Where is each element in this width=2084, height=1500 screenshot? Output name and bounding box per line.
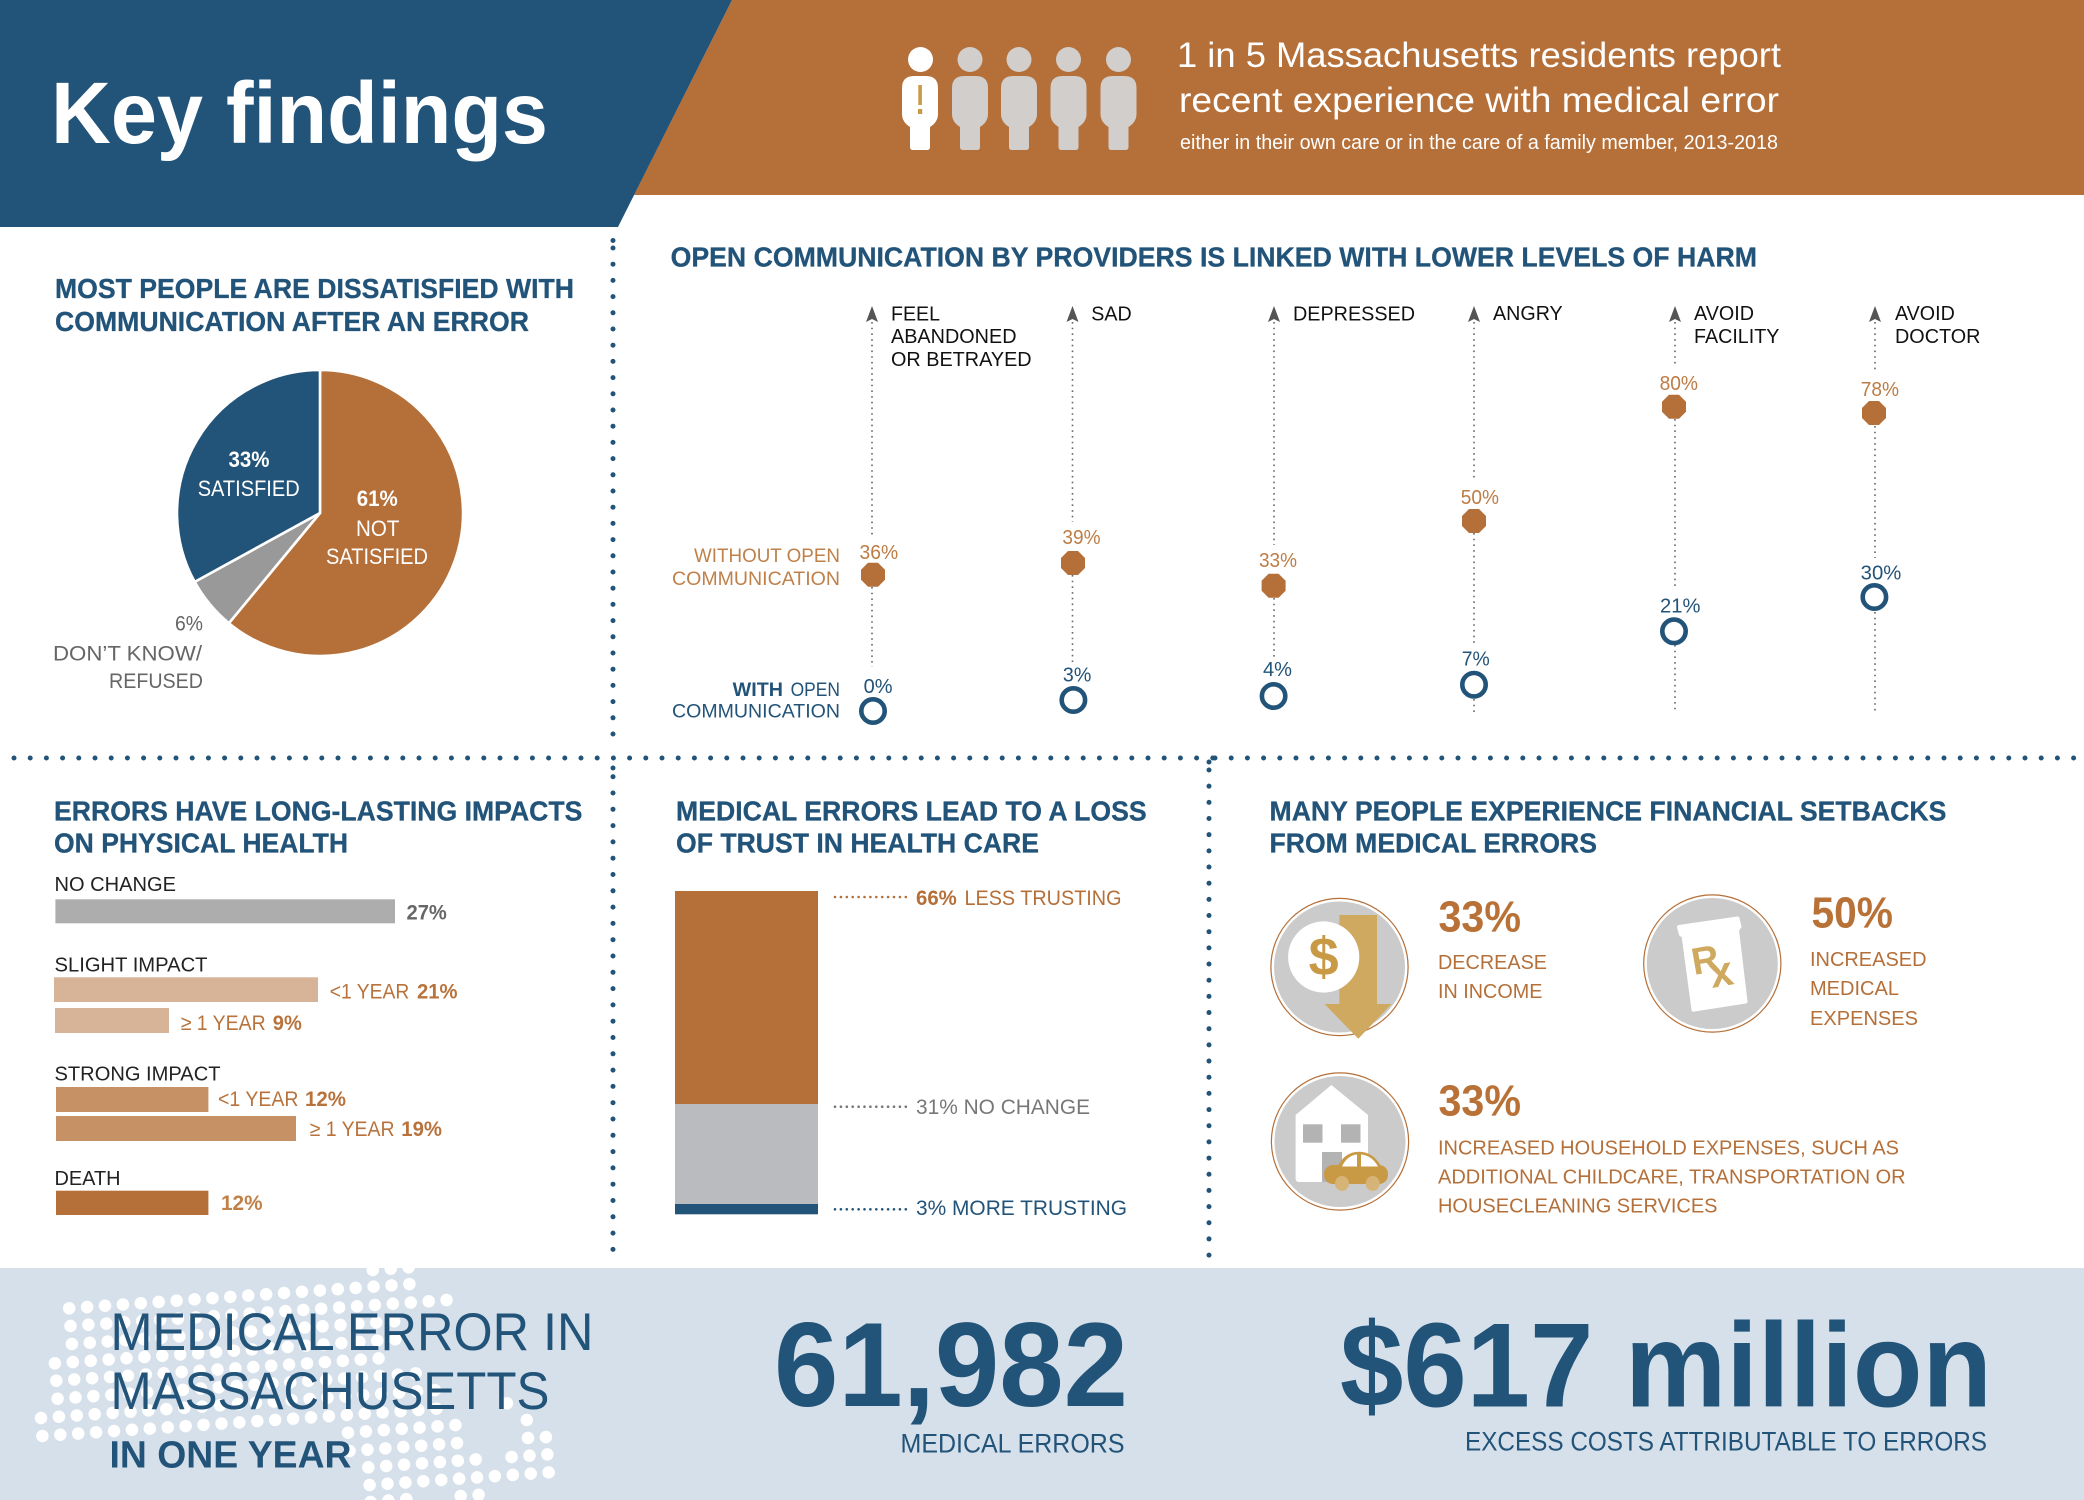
title block: Key findings: Key findings	[51, 65, 548, 162]
pie label: satisfied: SATISFIED	[198, 476, 300, 501]
column: feel abandoned or betrayed: FEEL	[891, 303, 940, 326]
stat: increased medical expenses: 50%	[1812, 889, 1893, 938]
bars: strong impact	[54, 1063, 442, 1141]
bars: strong impact: STRONG IMPACT	[54, 1063, 221, 1086]
bars: strong impact: 19%	[401, 1118, 442, 1141]
column: sad: 3%	[1063, 665, 1092, 687]
header statement: either in their own care or in the care of a family member, 2013-2018	[1180, 132, 1778, 154]
heading: MANY PEOPLE EXPERIENCE FINANCIAL SETBACKS	[1270, 796, 1946, 827]
heading	[54, 796, 582, 859]
column: avoid facility: AVOID	[1694, 302, 1754, 325]
heading	[1270, 796, 1946, 859]
pie label: not satisfied: SATISFIED	[326, 544, 428, 569]
stat: increased household expenses: ADDITIONAL CHILDCARE, TRANSPORTATION OR	[1438, 1165, 1906, 1188]
stat: excess costs: EXCESS COSTS ATTRIBUTABLE TO ERRORS	[1465, 1427, 1987, 1457]
column: sad	[1061, 303, 1132, 712]
column: feel abandoned or betrayed: 0%	[864, 676, 893, 698]
footer title	[110, 1303, 594, 1477]
legend: with open communication: WITH	[733, 679, 783, 701]
bars: slight impact: 21%	[417, 981, 458, 1004]
column: avoid doctor: 30%	[1861, 562, 1902, 584]
icon: prescription bottle: x	[1705, 946, 1737, 997]
map of Massachusetts in white dots	[41, 1267, 550, 1500]
panel: loss of trust	[675, 796, 1147, 1220]
icon: five people, one highlighted	[902, 47, 1136, 150]
heading: COMMUNICATION AFTER AN ERROR	[55, 306, 529, 337]
legend: with open communication: OPEN	[791, 679, 840, 701]
column: angry: 7%	[1462, 649, 1490, 671]
header statement: recent experience with medical error	[1179, 81, 1779, 120]
heading: MOST PEOPLE ARE DISSATISFIED WITH	[55, 273, 574, 304]
bar: death: 12%	[221, 1192, 263, 1215]
icon: dollar with down arrow	[1271, 898, 1408, 1039]
stat: increased medical expenses: INCREASED	[1810, 948, 1926, 971]
stat: increased household expenses	[1438, 1077, 1906, 1217]
heading: ON PHYSICAL HEALTH	[54, 828, 348, 859]
stat: decrease in income	[1438, 892, 1547, 1003]
header statement: 1 in 5 Massachusetts residents report	[1177, 36, 1781, 75]
heading: ERRORS HAVE LONG-LASTING IMPACTS	[54, 796, 582, 827]
label: more trusting: 3% MORE TRUSTING	[916, 1196, 1127, 1220]
legend: without open communication	[672, 545, 840, 590]
panel: physical health impacts	[54, 796, 582, 1215]
panel: financial setbacks	[1270, 796, 1946, 1217]
column: angry: 50%	[1461, 487, 1499, 509]
heading	[55, 273, 574, 337]
icon: prescription bottle: R	[1688, 938, 1723, 984]
stat: increased household expenses: 33%	[1438, 1077, 1521, 1126]
column: feel abandoned or betrayed: ABANDONED	[891, 325, 1016, 348]
title block: Key findings	[0, 0, 732, 227]
heading: OF TRUST IN HEALTH CARE	[676, 828, 1039, 859]
stat: increased household expenses: HOUSECLEANING SERVICES	[1438, 1194, 1718, 1217]
pie label: don't know or refused: REFUSED	[109, 669, 203, 693]
footer title: MEDICAL ERROR IN	[110, 1303, 594, 1362]
bars: strong impact: ≥ 1 YEAR	[310, 1118, 395, 1141]
column: depressed: 4%	[1263, 659, 1292, 681]
column: avoid doctor	[1861, 302, 1980, 712]
pie label: not satisfied	[326, 486, 428, 569]
bar: no change: NO CHANGE	[54, 873, 176, 896]
stat: medical errors: 61,982	[774, 1298, 1128, 1432]
label: less trusting	[835, 886, 1122, 910]
panel: open communication and harm	[671, 242, 1980, 723]
column: angry	[1461, 302, 1563, 712]
column: avoid facility: 21%	[1660, 596, 1701, 618]
pie label: don't know or refused: 6%	[175, 613, 203, 636]
legend: with open communication	[672, 679, 840, 723]
heading: MEDICAL ERRORS LEAD TO A LOSS	[676, 796, 1147, 827]
stat: increased medical expenses: MEDICAL	[1810, 977, 1899, 1000]
label: less trusting: 66%	[916, 886, 957, 910]
column: feel abandoned or betrayed	[860, 303, 1032, 723]
column: sad: SAD	[1091, 303, 1132, 326]
bars: slight impact	[54, 954, 458, 1035]
pie label: satisfied: 33%	[228, 447, 270, 472]
bars: slight impact: <1 YEAR	[330, 981, 409, 1004]
stat: decrease in income: 33%	[1438, 892, 1521, 941]
column: avoid doctor: DOCTOR	[1895, 325, 1980, 348]
heading: FROM MEDICAL ERRORS	[1270, 828, 1597, 859]
stat: medical errors: MEDICAL ERRORS	[900, 1429, 1124, 1459]
heading	[676, 796, 1147, 859]
footer band: statewide totals	[0, 1267, 2084, 1500]
column: feel abandoned or betrayed: OR BETRAYED	[891, 348, 1032, 371]
header banner: 1 in 5 residents	[634, 0, 2084, 195]
column: depressed	[1259, 303, 1415, 708]
bar: no change: 27%	[406, 901, 447, 924]
pie chart	[177, 370, 463, 656]
icon: prescription bottle	[1644, 895, 1781, 1032]
label: less trusting: LESS TRUSTING	[964, 886, 1122, 910]
bars: slight impact: 9%	[273, 1012, 302, 1035]
legend: with open communication: COMMUNICATION	[672, 701, 840, 723]
label: no change: 31% NO CHANGE	[916, 1095, 1090, 1119]
pie label: not satisfied: NOT	[356, 516, 399, 541]
column: angry: ANGRY	[1493, 302, 1563, 325]
stat: increased medical expenses	[1810, 889, 1926, 1030]
pie label: not satisfied: 61%	[357, 486, 398, 511]
icon: dollar with down arrow: $	[1309, 927, 1339, 987]
stacked bar	[675, 891, 818, 1214]
column: feel abandoned or betrayed: 36%	[860, 542, 898, 564]
bars: strong impact: <1 YEAR	[218, 1088, 298, 1111]
column: avoid facility: FACILITY	[1694, 325, 1780, 348]
bar: death: DEATH	[54, 1167, 120, 1190]
stat: increased medical expenses: EXPENSES	[1810, 1007, 1918, 1030]
stat: decrease in income: DECREASE	[1438, 951, 1547, 974]
column: sad: 39%	[1062, 527, 1101, 549]
bar: no change	[54, 873, 447, 924]
bars: strong impact: 12%	[305, 1088, 346, 1111]
column: avoid facility	[1660, 302, 1780, 712]
pie label: don't know or refused	[53, 613, 203, 693]
bar: death	[54, 1167, 263, 1215]
column: depressed: 33%	[1259, 550, 1297, 572]
footer title: IN ONE YEAR	[110, 1435, 352, 1477]
pie label: satisfied	[198, 447, 300, 501]
bars: slight impact: SLIGHT IMPACT	[54, 954, 208, 977]
column: avoid doctor: AVOID	[1895, 302, 1955, 325]
stat: increased household expenses: INCREASED HOUSEHOLD EXPENSES, SUCH AS	[1438, 1136, 1899, 1159]
header statement	[1177, 36, 1781, 154]
footer title: MASSACHUSETTS	[110, 1362, 550, 1421]
pie label: don't know or refused: DON’T KNOW/	[53, 643, 202, 666]
column: depressed: DEPRESSED	[1293, 303, 1415, 326]
heading: OPEN COMMUNICATION BY PROVIDERS IS LINKED WITH LOWER LEVELS OF HARM	[671, 242, 1757, 272]
column: avoid doctor: 78%	[1861, 379, 1899, 401]
bars: slight impact: ≥ 1 YEAR	[181, 1012, 266, 1035]
stat: excess costs: $617 million	[1340, 1299, 1992, 1433]
icon: house and car	[1271, 1073, 1409, 1210]
column: avoid facility: 80%	[1660, 373, 1698, 395]
legend: without open communication: WITHOUT OPEN	[694, 545, 840, 567]
legend: without open communication: COMMUNICATION	[672, 568, 840, 590]
stat: decrease in income: IN INCOME	[1438, 980, 1542, 1003]
panel: dissatisfied with communication	[53, 273, 574, 693]
